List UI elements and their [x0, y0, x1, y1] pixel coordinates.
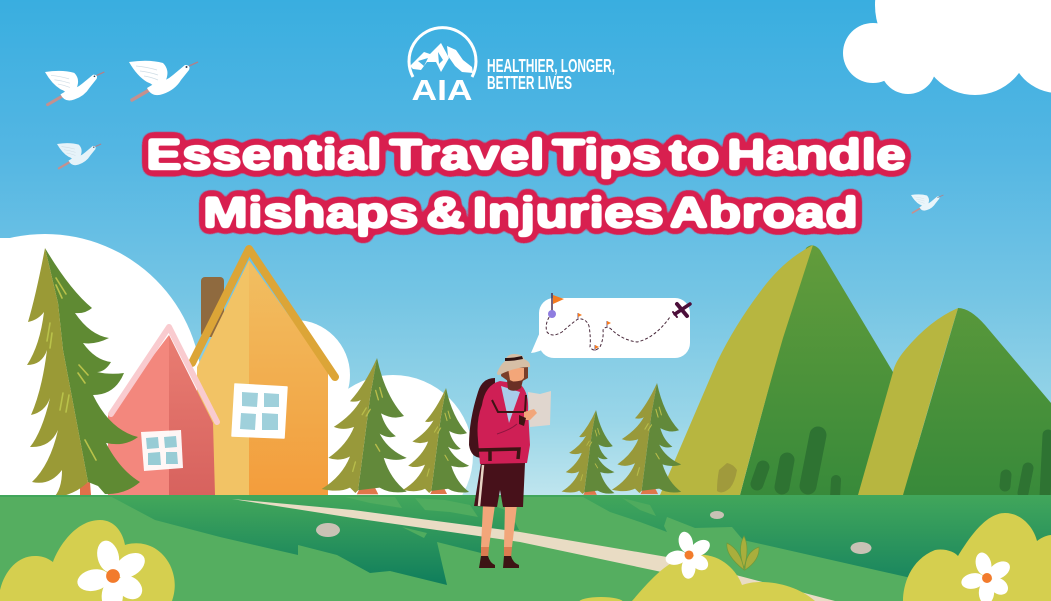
legs: [481, 505, 517, 547]
speech bubble with route map: [531, 293, 690, 358]
logo emblem: [409, 28, 476, 77]
house: yellow: [192, 249, 335, 495]
shoes: [479, 556, 519, 568]
logo tagline: [487, 56, 615, 93]
straps: [492, 395, 526, 412]
beard: [507, 380, 523, 391]
bird: upper centre left: [129, 61, 198, 100]
hat: [497, 354, 530, 375]
head: [501, 367, 528, 383]
window: [232, 384, 287, 438]
trees: centre left pair: [322, 358, 469, 494]
ground light patch: [622, 498, 656, 516]
plane: [673, 304, 690, 317]
trees: centre right pair: [562, 383, 681, 495]
ground shadow: left: [108, 495, 519, 585]
start flag: [548, 293, 564, 318]
logo tagline: BETTER LIVES: [487, 73, 572, 93]
stones: [316, 511, 872, 554]
cloud: top right: [843, 0, 1051, 95]
logo: [409, 28, 615, 107]
bush: bottom left with flower: [0, 520, 175, 601]
title: Essential Travel Tips to Handle: [146, 131, 906, 179]
path: [232, 499, 835, 601]
roof: [111, 327, 217, 422]
bush: bottom centre with flower: [579, 530, 815, 601]
logo wordmark: AIA: [412, 75, 473, 107]
bush: bottom right with flower: [903, 513, 1051, 601]
birds: [45, 61, 943, 213]
ground shadow light patches: [345, 497, 478, 538]
jacket: [478, 381, 530, 464]
chimney: [201, 277, 224, 337]
logo tagline: HEALTHIER, LONGER,: [487, 56, 615, 76]
dashed route: [546, 313, 670, 350]
title: Mishaps & Injuries Abroad: [203, 189, 858, 237]
hand: [524, 409, 537, 420]
mountain: large: [660, 245, 930, 498]
socks: [481, 547, 512, 558]
bird: right: [911, 194, 943, 213]
shorts: [474, 463, 525, 507]
map: [528, 391, 551, 427]
roof: [192, 249, 335, 377]
traveller: [469, 354, 551, 568]
title: [146, 131, 906, 237]
ground: [0, 495, 1051, 601]
bird: lower left: [57, 143, 101, 168]
plant: leaves: [727, 536, 759, 570]
mountains: [660, 245, 1051, 498]
cloud: large left hills behind houses: [0, 234, 473, 548]
tree: large left: [27, 248, 140, 508]
shirt: [501, 386, 520, 423]
backpack: [469, 378, 495, 458]
window: [141, 430, 183, 471]
waypoint flags: [578, 313, 611, 351]
ground shadow: right: [583, 497, 1051, 601]
mountain: small: [858, 308, 1051, 496]
house: red: [108, 327, 217, 495]
bird: upper left: [45, 71, 104, 105]
